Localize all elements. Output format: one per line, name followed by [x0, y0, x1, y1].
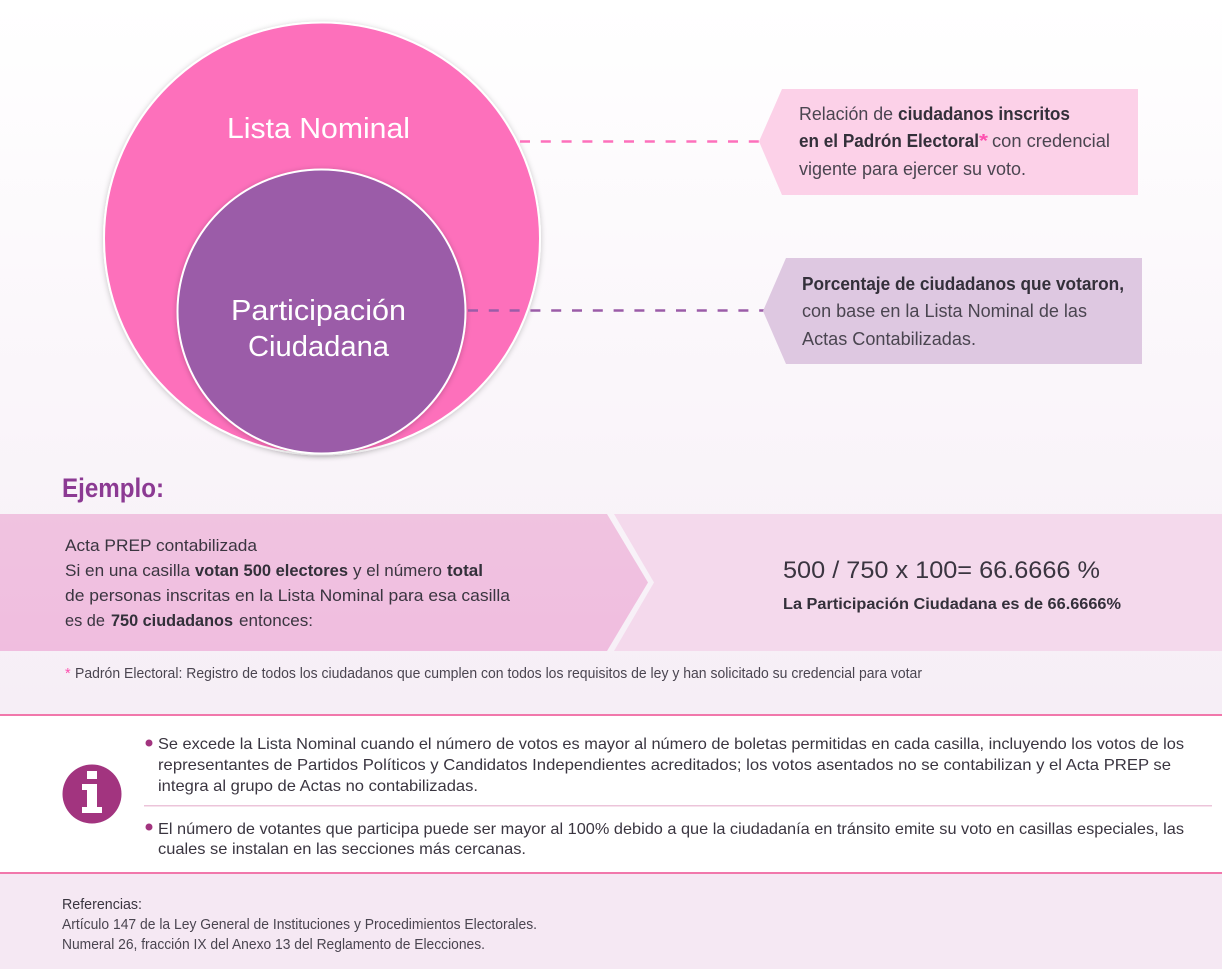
- footnote: Padrón Electoral: *: [65, 666, 71, 682]
- example text: Si en una casilla: [65, 562, 191, 580]
- connector: purple dashed line: [468, 309, 764, 312]
- example text: y el número: [353, 562, 442, 580]
- note 2: El número de votantes que participa puede ser mayor al 100% debido a que la ciudadanía en tránsito emite su voto en casillas especiales, las: [158, 821, 1184, 838]
- label: Participación Ciudadana: Ciudadana: [248, 331, 390, 363]
- note 1: [146, 736, 1184, 795]
- panel: references: Numeral 26, fracción IX del Anexo 13 del Reglamento de Elecciones.: [62, 937, 485, 953]
- example text: es de: [65, 612, 105, 630]
- connector: pink dashed line: [520, 140, 760, 143]
- diagram: nested circles: [104, 22, 540, 454]
- callout: Lista Nominal definition: vigente para ejercer su voto.: [799, 159, 1026, 179]
- callout: Participación Ciudadana definition: Actas Contabilizadas.: [802, 329, 976, 349]
- callout: Lista Nominal definition: *: [979, 131, 988, 151]
- formula result: [783, 557, 1121, 613]
- callout: Lista Nominal definition: con credencial: [992, 131, 1110, 151]
- example text: total: [447, 562, 483, 580]
- circle: Lista Nominal: [104, 22, 540, 454]
- example text: entonces:: [239, 612, 313, 630]
- callout: Lista Nominal definition: Relación de: [799, 104, 893, 124]
- note 1: integra al grupo de Actas no contabilizadas.: [158, 778, 478, 795]
- panel: references: Artículo 147 de la Ley General de Instituciones y Procedimientos Electorales.: [62, 917, 537, 933]
- note 2: cuales se instalan en las secciones más cercanas.: [158, 841, 526, 858]
- callout: Lista Nominal definition: ciudadanos inscritos: [898, 104, 1070, 124]
- example text: votan 500 electores: [195, 562, 348, 580]
- callout: Lista Nominal definition: en el Padrón Electoral: [799, 131, 979, 151]
- banner: left arrow panel: [0, 514, 648, 651]
- panel: references: Referencias:: [62, 897, 142, 913]
- banner: right panel: [614, 514, 1222, 651]
- heading: Ejemplo: Ejemplo:: [62, 473, 164, 503]
- circle: Participación Ciudadana: [178, 170, 466, 454]
- example text: [65, 537, 511, 630]
- label: Participación Ciudadana: Participación: [231, 295, 406, 327]
- formula result: La Participación Ciudadana es de 66.6666%: [783, 596, 1121, 613]
- note 1: Se excede la Lista Nominal cuando el número de votos es mayor al número de boletas permitidas en cada casilla, incluyendo los votos de los: [158, 736, 1184, 753]
- formula result: 500 / 750 x 100= 66.6666 %: [783, 557, 1100, 584]
- callout: Participación Ciudadana definition: [763, 258, 1142, 364]
- callout: Participación Ciudadana definition: Porcentaje de ciudadanos que votaron,: [802, 274, 1124, 294]
- background: [0, 0, 1222, 714]
- example text: 750 ciudadanos: [111, 612, 233, 630]
- note 1: representantes de Partidos Políticos y Candidatos Independientes acreditados; los votos asentados no se contabilizan y el Acta PREP se: [158, 757, 1171, 774]
- panel: notes: [0, 714, 1222, 874]
- icon: info: [62, 764, 122, 824]
- label: Lista Nominal: Lista Nominal: [227, 113, 410, 145]
- label: Participación Ciudadana: [231, 295, 406, 363]
- note 2: [146, 821, 1184, 858]
- callout: Participación Ciudadana definition: con base en la Lista Nominal de las: [802, 301, 1087, 321]
- example text: de personas inscritas en la Lista Nominal para esa casilla: [65, 587, 511, 605]
- callout: Lista Nominal definition: [759, 89, 1138, 195]
- footnote: Padrón Electoral: Padrón Electoral: Registro de todos los ciudadanos que cumplen con todos los requisitos de ley y han solicitado su credencial para votar: [75, 666, 922, 682]
- panel: references: [0, 874, 1222, 969]
- example text: Acta PREP contabilizada: [65, 537, 258, 555]
